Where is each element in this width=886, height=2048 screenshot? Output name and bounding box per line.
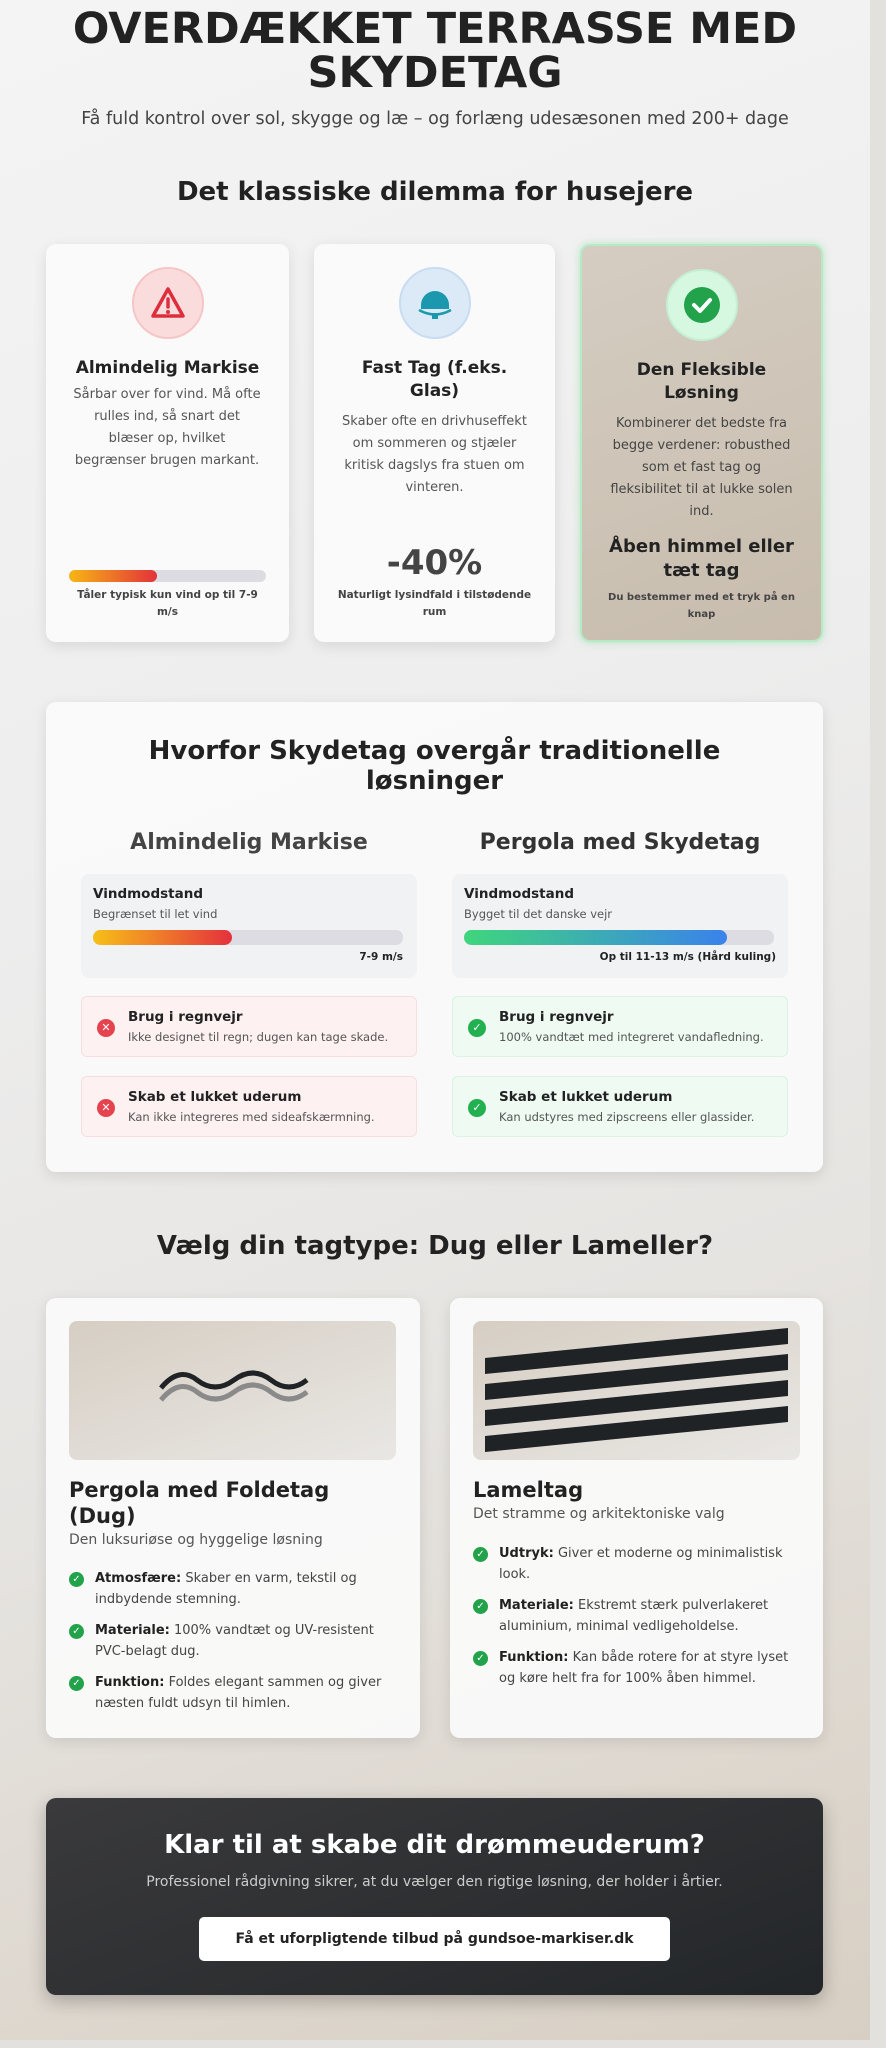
bullet list: Funktion: Foldes elegant sammen og giver næsten fuldt udsyn til himlen. xyxy=(95,1675,381,1711)
title xyxy=(73,4,797,98)
bullet list: Funktion: Kan både rotere for at styre lyset og køre helt fra for 100% åben himmel. xyxy=(499,1650,788,1686)
subtitle: Den luksuriøse og hyggelige løsning xyxy=(69,1532,323,1548)
title: (Dug) xyxy=(69,1504,136,1528)
card text: Kombinerer det bedste fra begge verdener: robusthed som et fast tag og fleksibilitet til at lukke solen ind. xyxy=(610,416,793,519)
panel heading xyxy=(149,736,720,796)
bullet list xyxy=(69,1571,382,1711)
row: rain right xyxy=(452,996,788,1057)
column heading left: Almindelig Markise xyxy=(130,830,368,855)
row: rain left: Ikke designet til regn; dugen kan tage skade. xyxy=(128,1030,388,1044)
row: rain right: 100% vandtæt med integreret vandafledning. xyxy=(499,1030,764,1044)
row: rain left: Brug i regnvejr xyxy=(128,1009,243,1025)
bar xyxy=(93,930,403,945)
bullet list: Materiale: Ekstremt stærk pulverlakeret aluminium, minimal vedligeholdelse. xyxy=(499,1598,768,1634)
bar xyxy=(464,930,774,945)
row: enclosure right: ✓ xyxy=(472,1101,482,1114)
highlight caption: Du bestemmer med et tryk på en knap xyxy=(608,592,795,620)
CTA panel xyxy=(46,1798,823,1995)
panel heading: Hvorfor Skydetag overgår traditionelle xyxy=(149,736,720,766)
card title: Løsning xyxy=(664,383,739,403)
card: foldetag xyxy=(46,1298,420,1738)
title: OVERDÆKKET TERRASSE MED xyxy=(73,4,797,54)
row: enclosure right xyxy=(452,1076,788,1137)
card title: Fast Tag (f.eks. xyxy=(362,358,507,378)
card: lameltag xyxy=(450,1298,823,1738)
row: enclosure right: Skab et lukket uderum xyxy=(499,1089,672,1105)
title: Pergola med Foldetag xyxy=(69,1478,329,1502)
card text: Sårbar over for vind. Må ofte rulles ind, så snart det blæser op, hvilket begrænser brugen markant. xyxy=(73,387,261,468)
wind box left xyxy=(81,874,417,978)
card: fleksible løsning xyxy=(580,244,823,642)
wind box left: Vindmodstand xyxy=(93,886,203,902)
bullet list: Udtryk: Giver et moderne og minimalistisk look. xyxy=(499,1546,782,1582)
wind box right: Vindmodstand xyxy=(464,886,574,902)
row: rain right: Brug i regnvejr xyxy=(499,1009,614,1025)
stat: -40% xyxy=(387,543,482,583)
CTA heading: Klar til at skabe dit drømmeuderum? xyxy=(164,1830,705,1860)
card: fast tag xyxy=(314,244,555,642)
panel heading: løsninger xyxy=(366,766,503,796)
row: rain left: ✕ xyxy=(101,1021,111,1034)
title: Lameltag xyxy=(473,1478,583,1502)
row: enclosure left: Skab et lukket uderum xyxy=(128,1089,301,1105)
row: enclosure left: Kan ikke integreres med sideafskærmning. xyxy=(128,1110,375,1124)
bar caption: Tåler typisk kun vind op til 7-9 m/s xyxy=(77,589,258,618)
bullet list: Materiale: 100% vandtæt og UV-resistent PVC-belagt dug. xyxy=(95,1623,374,1659)
icon: glass dome xyxy=(398,267,470,339)
CTA button xyxy=(199,1917,670,1961)
row: rain left xyxy=(81,996,417,1057)
title xyxy=(69,1478,329,1528)
row: enclosure left: ✕ xyxy=(101,1101,111,1114)
row: rain right: ✓ xyxy=(472,1021,482,1034)
card title xyxy=(362,358,507,401)
subtitle: Få fuld kontrol over sol, skygge og læ – og forlæng udesæsonen med 200+ dage xyxy=(81,109,789,129)
card title: Almindelig Markise xyxy=(76,358,259,378)
card: almindelig markise xyxy=(46,244,289,642)
stat caption: Naturligt lysindfald i tilstødende rum xyxy=(338,589,531,618)
row: enclosure right: Kan udstyres med zipscreens eller glassider. xyxy=(499,1110,754,1124)
wind box right xyxy=(452,874,788,978)
bullet list: Atmosfære: Skaber en varm, tekstil og indbydende stemning. xyxy=(95,1571,357,1607)
image: lameller xyxy=(473,1321,800,1460)
image: wave xyxy=(69,1321,396,1460)
wind box right: Bygget til det danske vejr xyxy=(464,907,612,921)
CTA text: Professionel rådgivning sikrer, at du vælger den rigtige løsning, der holder i årtier. xyxy=(146,1874,723,1890)
heading: dilemma: Det klassiske dilemma for husejere xyxy=(177,177,693,207)
CTA button: Få et uforpligtende tilbud på gundsoe-markiser.dk xyxy=(235,1931,634,1947)
heading: tagtype: Vælg din tagtype: Dug eller Lameller? xyxy=(157,1231,713,1261)
bullet list xyxy=(473,1546,788,1686)
icon: warning xyxy=(132,267,204,339)
wind box left: Begrænset til let vind xyxy=(93,907,217,921)
wind bar xyxy=(69,570,266,582)
card text: Skaber ofte en drivhuseffekt om sommeren og stjæler kritisk dagslys fra stuen om vinteren. xyxy=(342,414,527,495)
card title xyxy=(637,360,766,403)
panel: comparison xyxy=(46,702,823,1172)
icon: check xyxy=(666,269,738,341)
wind box left: 7-9 m/s xyxy=(359,951,403,963)
column heading right: Pergola med Skydetag xyxy=(480,830,760,855)
card title: Den Fleksible xyxy=(637,360,766,380)
row: enclosure left xyxy=(81,1076,417,1137)
wind box right: Op til 11-13 m/s (Hård kuling) xyxy=(600,951,776,963)
card title: Glas) xyxy=(410,381,459,401)
highlight: Åben himmel eller tæt tag xyxy=(609,536,794,581)
title: SKYDETAG xyxy=(307,48,563,98)
subtitle: Det stramme og arkitektoniske valg xyxy=(473,1506,725,1522)
